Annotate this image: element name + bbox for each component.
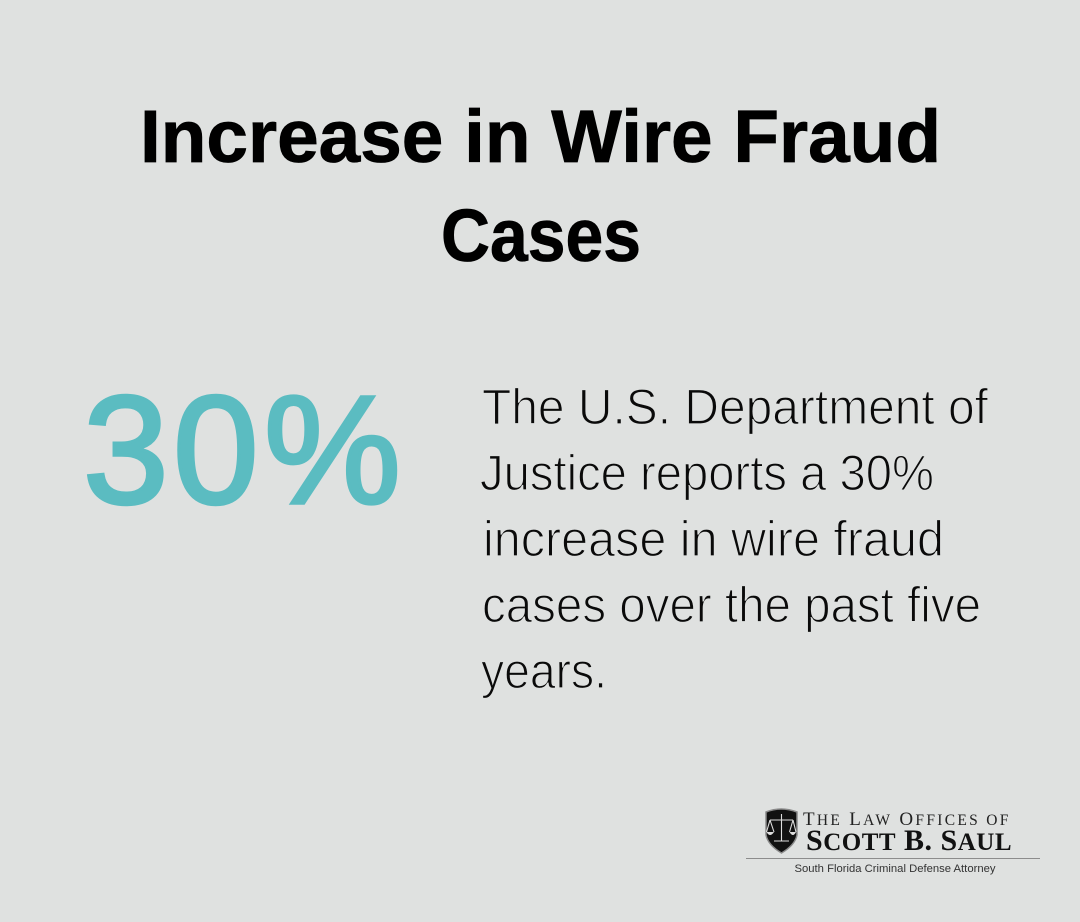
description text block: years. (481, 643, 607, 699)
big statistic: 30%: 30% (83, 364, 401, 536)
logo line 2: SCOTT B. SAUL (806, 824, 1012, 857)
description text block (480, 379, 988, 699)
logo line 1: THE LAW OFFICES OF (803, 809, 1011, 830)
description text block: The U.S. Department of (482, 379, 988, 435)
description text block: Justice reports a 30% (480, 445, 934, 501)
law office logo (746, 809, 1040, 875)
description text block: cases over the past five (482, 577, 981, 633)
logo tagline: South Florida Criminal Defense Attorney (794, 863, 996, 875)
title: Cases (441, 194, 641, 277)
icon: shield with scales (766, 809, 797, 853)
description text block: increase in wire fraud (483, 511, 944, 567)
title (140, 95, 941, 277)
title: Increase in Wire Fraud (140, 95, 941, 178)
